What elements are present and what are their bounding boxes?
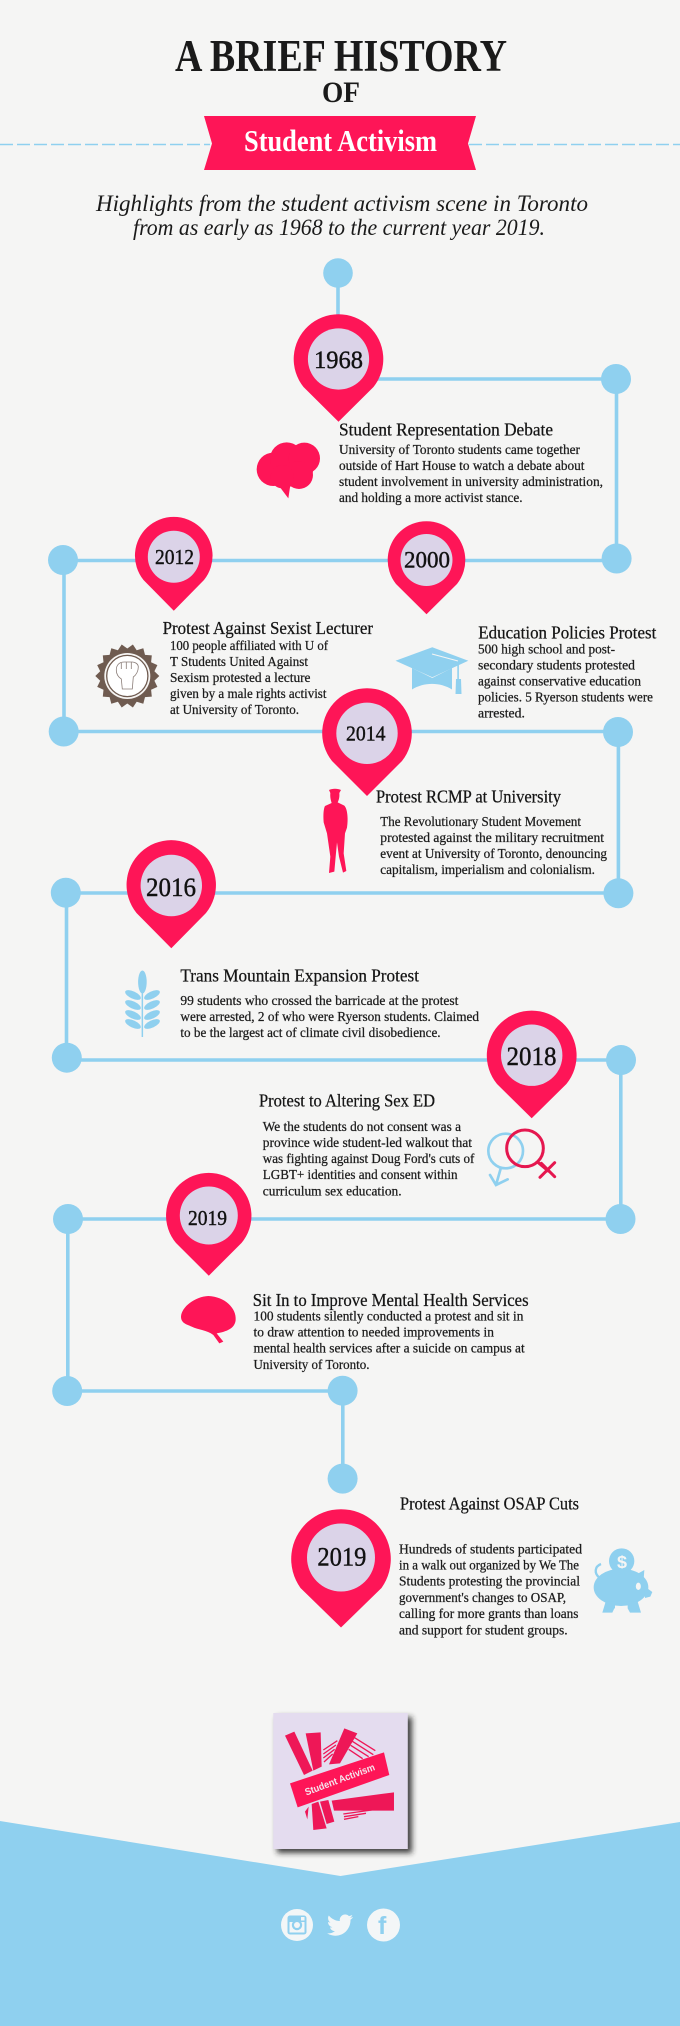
banner: Student Activism: Student Activism xyxy=(244,123,437,158)
event: Education Policies Protest: secondary students protested xyxy=(478,657,635,672)
icon: gender symbols xyxy=(488,1130,555,1185)
event: Protest Against OSAP Cuts: calling for more grants than loans xyxy=(399,1606,578,1621)
event: Protest to Altering Sex ED: Protest to Altering Sex ED xyxy=(259,1091,435,1111)
logo card: Student Activism xyxy=(304,1762,377,1798)
event: Protest RCMP at University: event at University of Toronto, denouncing xyxy=(380,846,607,861)
event: Protest Against Sexist Lecturer: given by a male rights activist xyxy=(170,686,327,701)
event: Protest RCMP at University: Protest RCMP at University xyxy=(376,787,561,807)
event: Trans Mountain Expansion Protest: to be the largest act of climate civil disobedience. xyxy=(180,1025,441,1040)
event: Protest to Altering Sex ED: province wide student-led walkout that xyxy=(263,1135,472,1150)
pin: 2018: 2018 xyxy=(506,1042,556,1071)
pin: 1968 xyxy=(294,314,383,422)
event: Protest Against Sexist Lecturer: at University of Toronto. xyxy=(170,702,299,717)
event: Sit In to Improve Mental Health Services xyxy=(253,1290,529,1372)
title xyxy=(175,31,507,109)
event: Education Policies Protest: against conservative education xyxy=(478,674,641,688)
title: OF xyxy=(322,76,360,109)
event: Protest to Altering Sex ED: was fighting against Doug Ford's cuts of xyxy=(263,1151,475,1166)
event: Student Representation Debate: and holding a more activist stance. xyxy=(339,490,522,505)
event: Trans Mountain Expansion Protest: 99 students who crossed the barricade at the protest xyxy=(180,993,459,1008)
event: Student Representation Debate: student involvement in university administration, xyxy=(339,474,603,489)
banner: Student Activism xyxy=(204,116,476,170)
footer background xyxy=(0,1821,680,2026)
pin: 2019 walkout xyxy=(291,1509,391,1628)
pin: 2016 xyxy=(127,840,216,948)
pin: 2014: 2014 xyxy=(346,722,386,746)
subtitle: from as early as 1968 to the current year 2019. xyxy=(133,215,545,240)
pin: 2019 walkout: 2019 xyxy=(317,1543,366,1572)
icon: wheat leaf xyxy=(124,970,161,1037)
event: Protest RCMP at University: capitalism, imperialism and colonialism. xyxy=(380,862,595,877)
event: Protest Against OSAP Cuts: government's changes to OSAP, xyxy=(399,1590,566,1605)
icon: speech bubble xyxy=(257,442,320,498)
event: Education Policies Protest: policies. 5 Ryerson students were xyxy=(478,690,653,705)
event: Protest to Altering Sex ED: We the students do not consent was a xyxy=(263,1119,461,1134)
event: Protest Against Sexist Lecturer: Protest Against Sexist Lecturer xyxy=(163,618,373,638)
icon: twitter xyxy=(327,1914,353,1936)
event: Protest to Altering Sex ED xyxy=(259,1091,475,1198)
event: Protest Against OSAP Cuts: in a walk out organized by We The xyxy=(399,1558,579,1573)
event: Protest Against OSAP Cuts: Protest Against OSAP Cuts xyxy=(400,1493,579,1513)
pin: 2016: 2016 xyxy=(146,873,196,902)
timeline nodes xyxy=(48,258,636,1494)
pin: 2012: 2012 xyxy=(155,545,194,569)
icon: piggy bank: $ xyxy=(617,1552,627,1572)
event: Education Policies Protest: Education Policies Protest xyxy=(478,622,656,642)
event: Protest to Altering Sex ED: LGBT+ identities and consent within xyxy=(263,1167,458,1182)
event: Protest Against Sexist Lecturer: 100 people affiliated with U of xyxy=(170,638,328,653)
event: Protest Against OSAP Cuts xyxy=(399,1493,582,1637)
event: Trans Mountain Expansion Protest: Trans Mountain Expansion Protest xyxy=(180,966,419,986)
social icons xyxy=(281,1908,400,1942)
icon: soldier silhouette xyxy=(323,789,348,873)
pin: 2019 xyxy=(166,1173,251,1276)
event: Trans Mountain Expansion Protest: were arrested, 2 of who were Ryerson students. Claimed xyxy=(180,1009,479,1024)
pin: 2018 xyxy=(487,1011,577,1118)
pin: 2012 xyxy=(135,517,213,611)
event: Protest Against Sexist Lecturer xyxy=(163,618,373,717)
event: Protest Against OSAP Cuts: Hundreds of students participated xyxy=(399,1542,582,1557)
event: Student Representation Debate: University of Toronto students came together xyxy=(339,442,580,457)
event: Trans Mountain Expansion Protest xyxy=(180,966,479,1040)
event: Student Representation Debate xyxy=(339,420,603,505)
event: Education Policies Protest: 500 high school and post- xyxy=(478,641,615,656)
event: Protest Against Sexist Lecturer: Sexism protested a lecture xyxy=(170,670,310,685)
timeline connector path xyxy=(64,273,621,1478)
pin: 2000 xyxy=(388,521,465,614)
icon: graduation cap xyxy=(396,647,468,694)
event: Protest Against OSAP Cuts: and support for student groups. xyxy=(399,1622,568,1637)
icon: facebook: f xyxy=(378,1912,387,1940)
event: Student Representation Debate: outside of Hart House to watch a debate about xyxy=(339,458,585,473)
event: Sit In to Improve Mental Health Services: to draw attention to needed improvements in xyxy=(254,1325,494,1340)
pin: 1968: 1968 xyxy=(314,347,363,374)
logo card xyxy=(273,1713,412,1853)
title: A BRIEF HISTORY xyxy=(175,31,507,81)
pin: 2000: 2000 xyxy=(404,547,450,572)
event: Education Policies Protest: arrested. xyxy=(478,706,525,721)
icon: instagram xyxy=(281,1909,313,1941)
event: Sit In to Improve Mental Health Services: mental health services after a suicide on campus at xyxy=(254,1341,525,1356)
subtitle xyxy=(95,191,588,240)
event: Protest to Altering Sex ED: curriculum sex education. xyxy=(263,1184,402,1198)
event: Protest Against OSAP Cuts: Students protesting the provincial xyxy=(399,1574,580,1589)
icon: fist seal xyxy=(95,644,159,708)
icon: brain xyxy=(181,1296,236,1343)
event: Education Policies Protest xyxy=(478,622,656,721)
event: Sit In to Improve Mental Health Services: University of Toronto. xyxy=(254,1357,370,1372)
dashed divider xyxy=(0,144,680,146)
event: Protest RCMP at University xyxy=(376,787,607,877)
event: Protest RCMP at University: The Revolutionary Student Movement xyxy=(380,814,581,829)
pin: 2019: 2019 xyxy=(188,1206,227,1230)
pin: 2014 xyxy=(322,688,412,796)
event: Sit In to Improve Mental Health Services: Sit In to Improve Mental Health Services xyxy=(253,1290,529,1310)
icon: piggy bank xyxy=(594,1548,652,1613)
event: Sit In to Improve Mental Health Services: 100 students silently conducted a protest and sit in xyxy=(254,1309,524,1324)
event: Student Representation Debate: Student Representation Debate xyxy=(339,420,553,440)
subtitle: Highlights from the student activism scene in Toronto xyxy=(95,191,588,216)
event: Protest RCMP at University: protested against the military recruitment xyxy=(380,830,604,845)
event: Protest Against Sexist Lecturer: T Students United Against xyxy=(170,654,308,669)
